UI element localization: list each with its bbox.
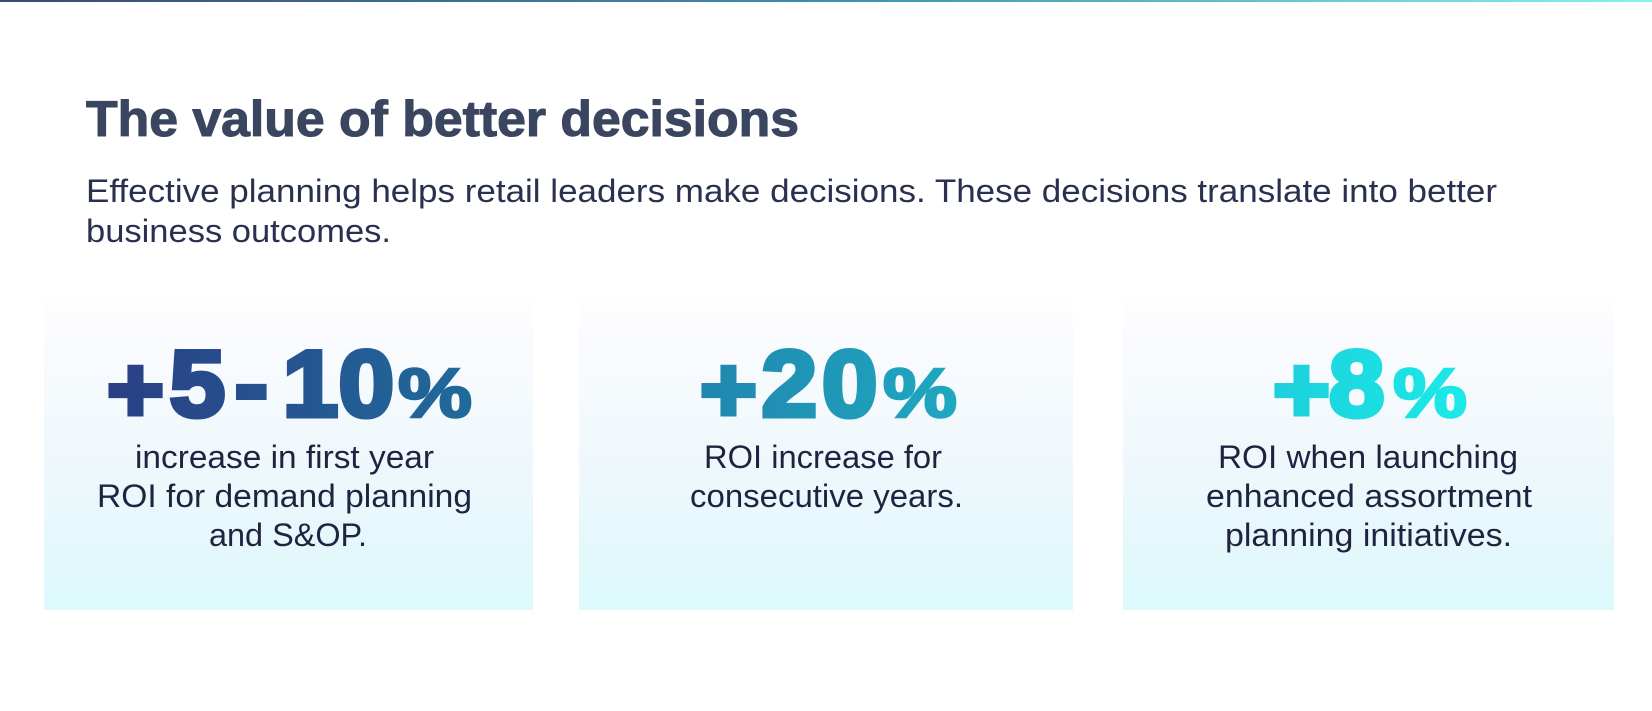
stat: +20%: + [700, 339, 757, 441]
description: consecutive years ROI: ROI increase for [704, 439, 942, 475]
description: assortment planning ROI [1206, 439, 1532, 553]
stat: +8% [1273, 331, 1467, 441]
top gradient bar [0, 0, 1652, 2]
description: consecutive years ROI: consecutive years. [690, 478, 963, 514]
stat: +20%: % [883, 354, 957, 432]
panel: consecutive years ROI [579, 298, 1073, 610]
stat: +5-10%: + [107, 339, 164, 441]
description: assortment planning ROI: enhanced assortment [1206, 478, 1532, 514]
intro text block: Effective planning helps retail leaders make decisions. These decisions translate into better [86, 173, 1497, 209]
description: assortment planning ROI: planning initiatives. [1225, 517, 1512, 553]
description: consecutive years ROI [690, 439, 963, 514]
card background: consecutive years ROI [579, 298, 1073, 610]
card background: assortment planning ROI [1123, 298, 1614, 610]
description: first year ROI [97, 439, 472, 553]
description: first year ROI: increase in first year [135, 439, 434, 475]
stat: +8%: % [1393, 354, 1467, 432]
panel: assortment planning ROI [1123, 298, 1614, 610]
stat: +5-10% [107, 331, 472, 441]
description: assortment planning ROI: ROI when launching [1218, 439, 1518, 475]
stat: +5-10%: 5-10 [170, 331, 394, 436]
panel: first year ROI [44, 298, 533, 610]
intro text block [86, 173, 1497, 249]
title: The value of better decisions [86, 91, 799, 147]
stat: +5-10%: % [398, 354, 472, 432]
stat: +20%: 20 [762, 331, 877, 436]
stat: +20% [700, 331, 957, 441]
card background: first year ROI [44, 298, 533, 610]
intro text block: business outcomes. [86, 213, 391, 249]
description: first year ROI: ROI for demand planning [97, 478, 472, 514]
stat: +8%: 8 [1329, 331, 1384, 436]
description: first year ROI: and S&OP. [209, 517, 367, 553]
stat: +8%: + [1273, 339, 1330, 441]
